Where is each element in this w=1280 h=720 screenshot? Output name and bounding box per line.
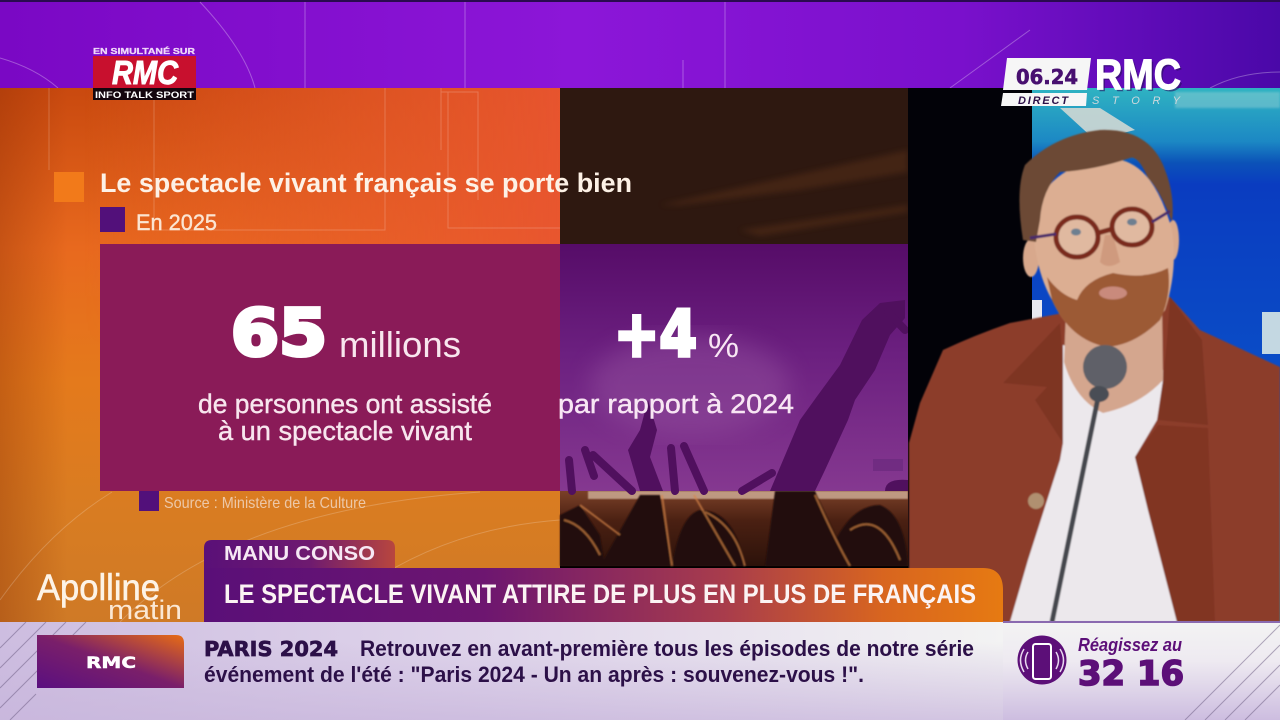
presenter: ears bbox=[1023, 220, 1179, 277]
presenter: jacket button bbox=[1028, 493, 1044, 509]
presenter: left collar bbox=[1003, 323, 1063, 443]
presenter: nose bbox=[1100, 235, 1120, 266]
stat: 65 millions bbox=[198, 297, 492, 446]
logo: RMC simulcast bbox=[93, 46, 196, 101]
icon: orange heading square bbox=[54, 172, 84, 202]
ticker: RMC label bbox=[37, 635, 184, 688]
presenter bbox=[909, 130, 1280, 622]
lower third: name tag bbox=[204, 540, 395, 568]
presenter: neck bbox=[1064, 300, 1163, 413]
stat: 65 millions: 65 bbox=[231, 297, 327, 371]
logo: channel clock and RMC Story: RMC bbox=[1097, 53, 1183, 101]
stat: +4 percent bbox=[558, 298, 794, 419]
lower third: headline bbox=[204, 568, 1003, 622]
stat: +4 percent: % bbox=[708, 327, 739, 364]
panel: concert photo bbox=[560, 88, 908, 566]
presenter: eyes bbox=[1071, 218, 1137, 236]
panel: key figures box bbox=[100, 244, 908, 491]
logo: channel clock and RMC Story bbox=[1001, 51, 1183, 107]
ticker bar bbox=[0, 622, 1004, 720]
presenter: jacket bbox=[909, 297, 1280, 622]
call to action text bbox=[1078, 635, 1184, 694]
ticker: text: Retrouvez en avant-première tous les épisodes de notre série bbox=[360, 636, 974, 661]
source note bbox=[139, 491, 366, 512]
background: studio blue screen bbox=[1032, 88, 1280, 622]
logo: channel clock and RMC Story: STORY bbox=[1092, 95, 1181, 107]
presenter: jacket fold bbox=[1135, 425, 1215, 622]
icon: phone bbox=[1018, 636, 1066, 684]
presenter: microphone bbox=[1052, 345, 1127, 622]
stat: +4 percent: +4 bbox=[614, 298, 697, 372]
subheading: En 2025 bbox=[136, 210, 217, 235]
logo: RMC simulcast: INFO TALK SPORT bbox=[95, 90, 194, 101]
stat: 65 millions: millions bbox=[339, 324, 461, 365]
heading: Le spectacle vivant français se porte bien bbox=[100, 168, 632, 198]
logo: channel clock and RMC Story: DIRECT bbox=[1018, 95, 1069, 107]
logo: Apolline matin: Apolline bbox=[37, 567, 160, 608]
logo: Apolline matin bbox=[37, 567, 182, 625]
panel: orange background bbox=[0, 88, 560, 622]
lower third: name tag: MANU CONSO bbox=[224, 543, 375, 565]
top purple band bbox=[0, 0, 1280, 88]
stat: 65 millions: de personnes ont assisté bbox=[198, 389, 492, 419]
call to action text: Réagissez au bbox=[1078, 635, 1182, 655]
photo overlay: purple crowd bbox=[560, 244, 908, 491]
presenter: right collar bbox=[1158, 297, 1208, 425]
presenter: shirt bbox=[1010, 345, 1177, 622]
presenter: hair bbox=[1019, 130, 1173, 242]
ticker: RMC label: RMC bbox=[86, 653, 136, 672]
logo: channel clock and RMC Story: 06.24 bbox=[1016, 65, 1078, 89]
ticker: text bbox=[204, 636, 974, 687]
presenter: mouth bbox=[1099, 286, 1127, 300]
logo: RMC simulcast: EN SIMULTANÉ SUR bbox=[93, 46, 195, 56]
stat: 65 millions: à un spectacle vivant bbox=[218, 416, 472, 446]
call to action panel bbox=[1003, 621, 1280, 720]
logo: RMC simulcast: RMC bbox=[112, 54, 179, 91]
ticker: text: événement de l'été : "Paris 2024 - Un an après : souvenez-vous !". bbox=[204, 662, 864, 687]
icon: purple subheading square bbox=[100, 207, 125, 232]
presenter: glasses bbox=[1030, 209, 1170, 257]
logo: channel clock and RMC Story: RMC bbox=[1095, 51, 1181, 99]
background: studio black wall bbox=[908, 88, 1032, 622]
presenter: face bbox=[1033, 159, 1174, 347]
ticker: text: PARIS 2024 bbox=[204, 637, 338, 661]
stat: +4 percent: par rapport à 2024 bbox=[558, 389, 794, 419]
call to action text: 32 16 bbox=[1078, 654, 1184, 694]
lower third: headline: LE SPECTACLE VIVANT ATTIRE DE PLUS EN PLUS DE FRANÇAIS bbox=[224, 579, 976, 609]
logo: Apolline matin: matin bbox=[108, 595, 182, 625]
source note: Source : Ministère de la Culture bbox=[164, 495, 366, 512]
presenter: beard bbox=[1047, 268, 1169, 347]
